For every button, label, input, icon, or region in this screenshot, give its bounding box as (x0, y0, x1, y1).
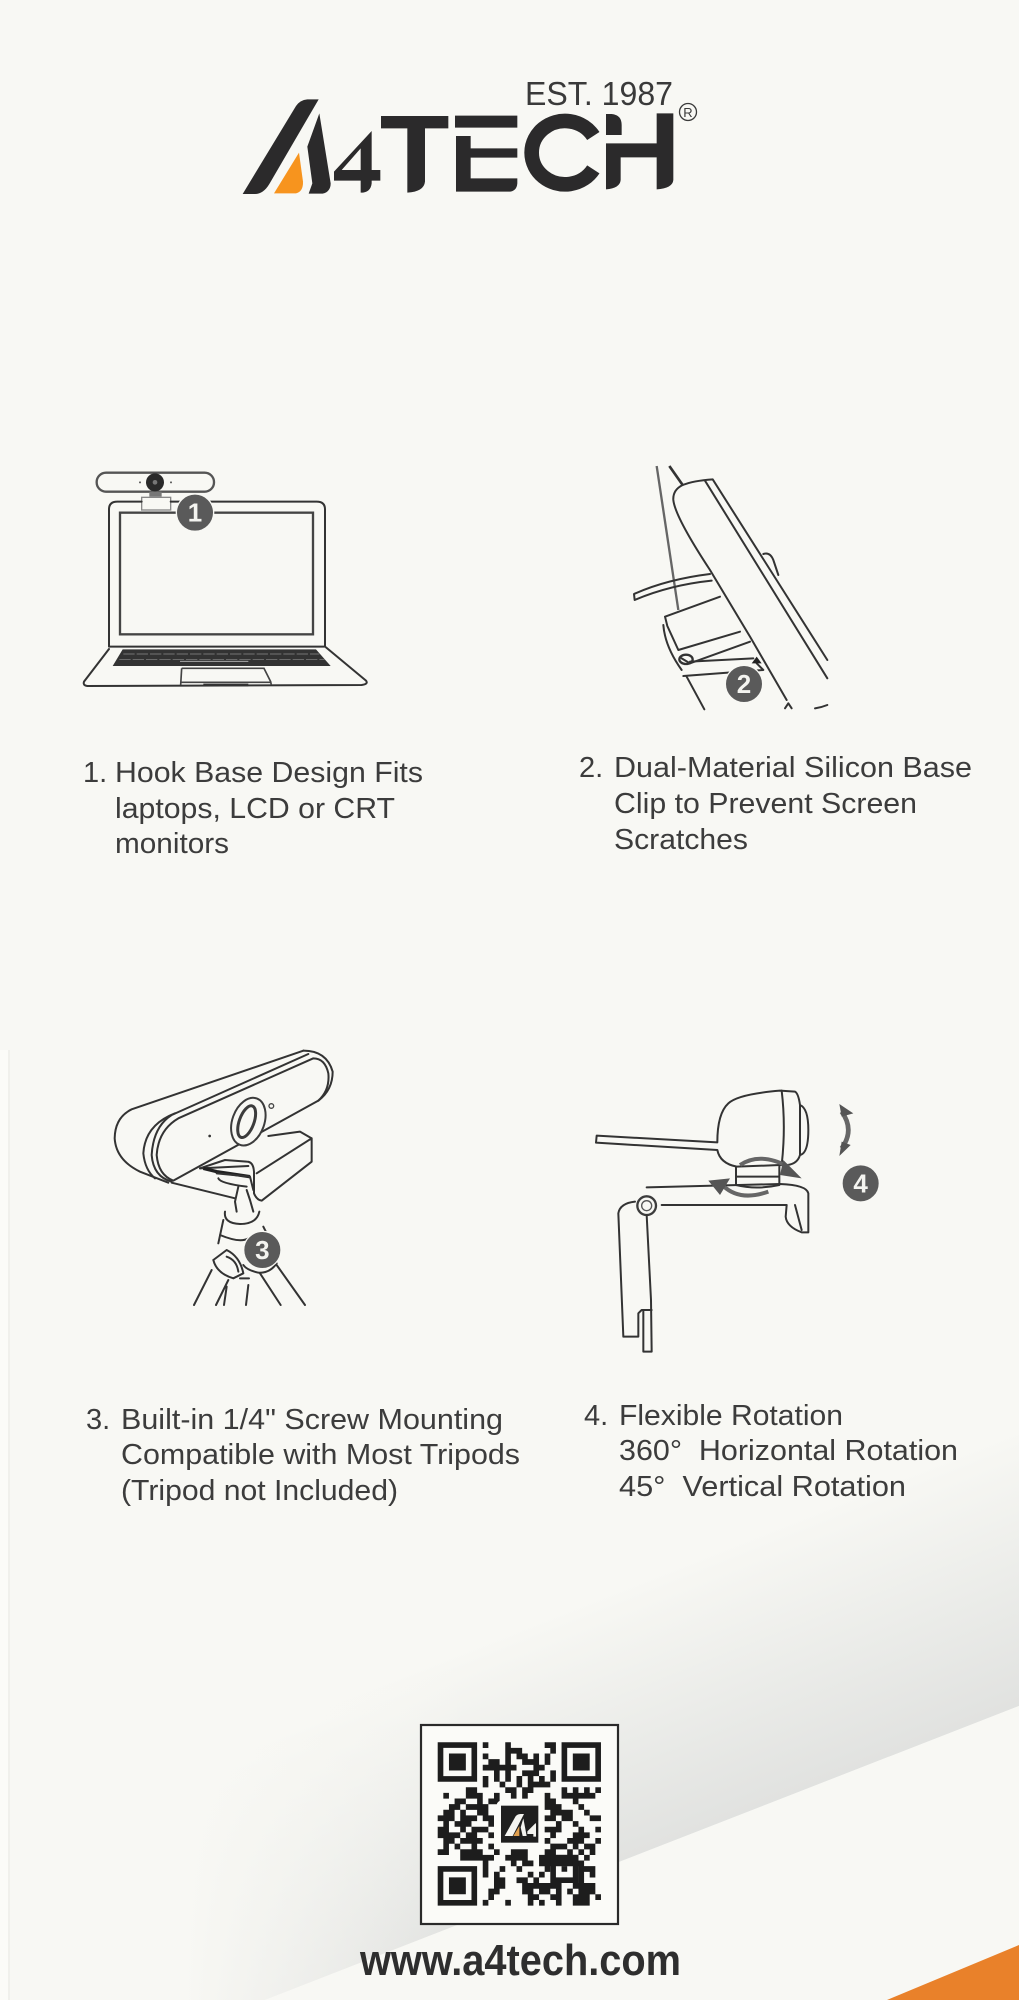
illustration 4: flexible rotation (596, 1091, 879, 1352)
badge 1 (176, 494, 214, 531)
text: step 2: 2. (579, 752, 603, 784)
text: step 2: Scratches (614, 824, 748, 856)
orange corner accent (887, 1945, 1019, 2000)
text: step 4: 4. (584, 1400, 608, 1432)
text: step 4: Flexible Rotation (619, 1400, 843, 1432)
text: step 3: Compatible with Most Tripods (121, 1439, 520, 1471)
registered mark: R (683, 105, 693, 120)
logo tagline: EST. 1987 (525, 75, 673, 112)
badge 3: 3 (255, 1235, 270, 1265)
badge 2 (725, 665, 763, 703)
QR code (421, 1725, 618, 1924)
badge 4 (842, 1165, 879, 1202)
text: step 4: 45° Vertical Rotation (619, 1471, 906, 1503)
registered mark (680, 104, 696, 120)
text: step 3: Built-in 1/4" Screw Mounting (121, 1404, 503, 1436)
webcam bar (97, 473, 214, 510)
text: step 3 (86, 1404, 520, 1507)
webcam and clip lines (634, 466, 827, 709)
text: step 1: Hook Base Design Fits (115, 757, 423, 789)
badge 1: 1 (188, 498, 202, 528)
QR finder patterns (438, 1742, 601, 1906)
logo: A4TECH EST. 1987 (243, 75, 696, 194)
badge 4: 4 (853, 1168, 868, 1198)
text: step 2 (579, 752, 972, 856)
text: step 4: 360° Horizontal Rotation (619, 1435, 958, 1467)
webcam body (115, 1051, 333, 1183)
rotation arrows (708, 1104, 853, 1196)
badge 2: 2 (737, 669, 751, 699)
illustration 2: silicon base clip (634, 466, 827, 709)
background grey diagonal band (0, 1050, 1019, 2000)
text: step 3: (Tripod not Included) (121, 1475, 398, 1507)
text: step 2: Dual-Material Silicon Base (614, 752, 972, 784)
illustration 3: webcam on tripod (115, 1051, 333, 1305)
text: step 4 (584, 1400, 958, 1503)
text: step 1: laptops, LCD or CRT (115, 793, 395, 825)
QR centre logo (497, 1801, 543, 1847)
illustration 1: webcam on laptop (84, 473, 367, 686)
text: step 1 (83, 757, 423, 860)
text: step 3: 3. (86, 1404, 110, 1436)
text: step 1: monitors (115, 828, 229, 860)
mount and tripod (172, 1132, 312, 1305)
text: step 1: 1. (83, 757, 107, 789)
clip arm (618, 1184, 808, 1352)
laptop (84, 502, 367, 686)
badge 3 (244, 1231, 281, 1269)
website URL: www.a4tech.com (359, 1936, 681, 1985)
logo mark A4 (243, 99, 380, 194)
logo wordmark TECH (381, 113, 673, 193)
webcam side view (596, 1091, 808, 1187)
text: step 2: Clip to Prevent Screen (614, 788, 917, 820)
